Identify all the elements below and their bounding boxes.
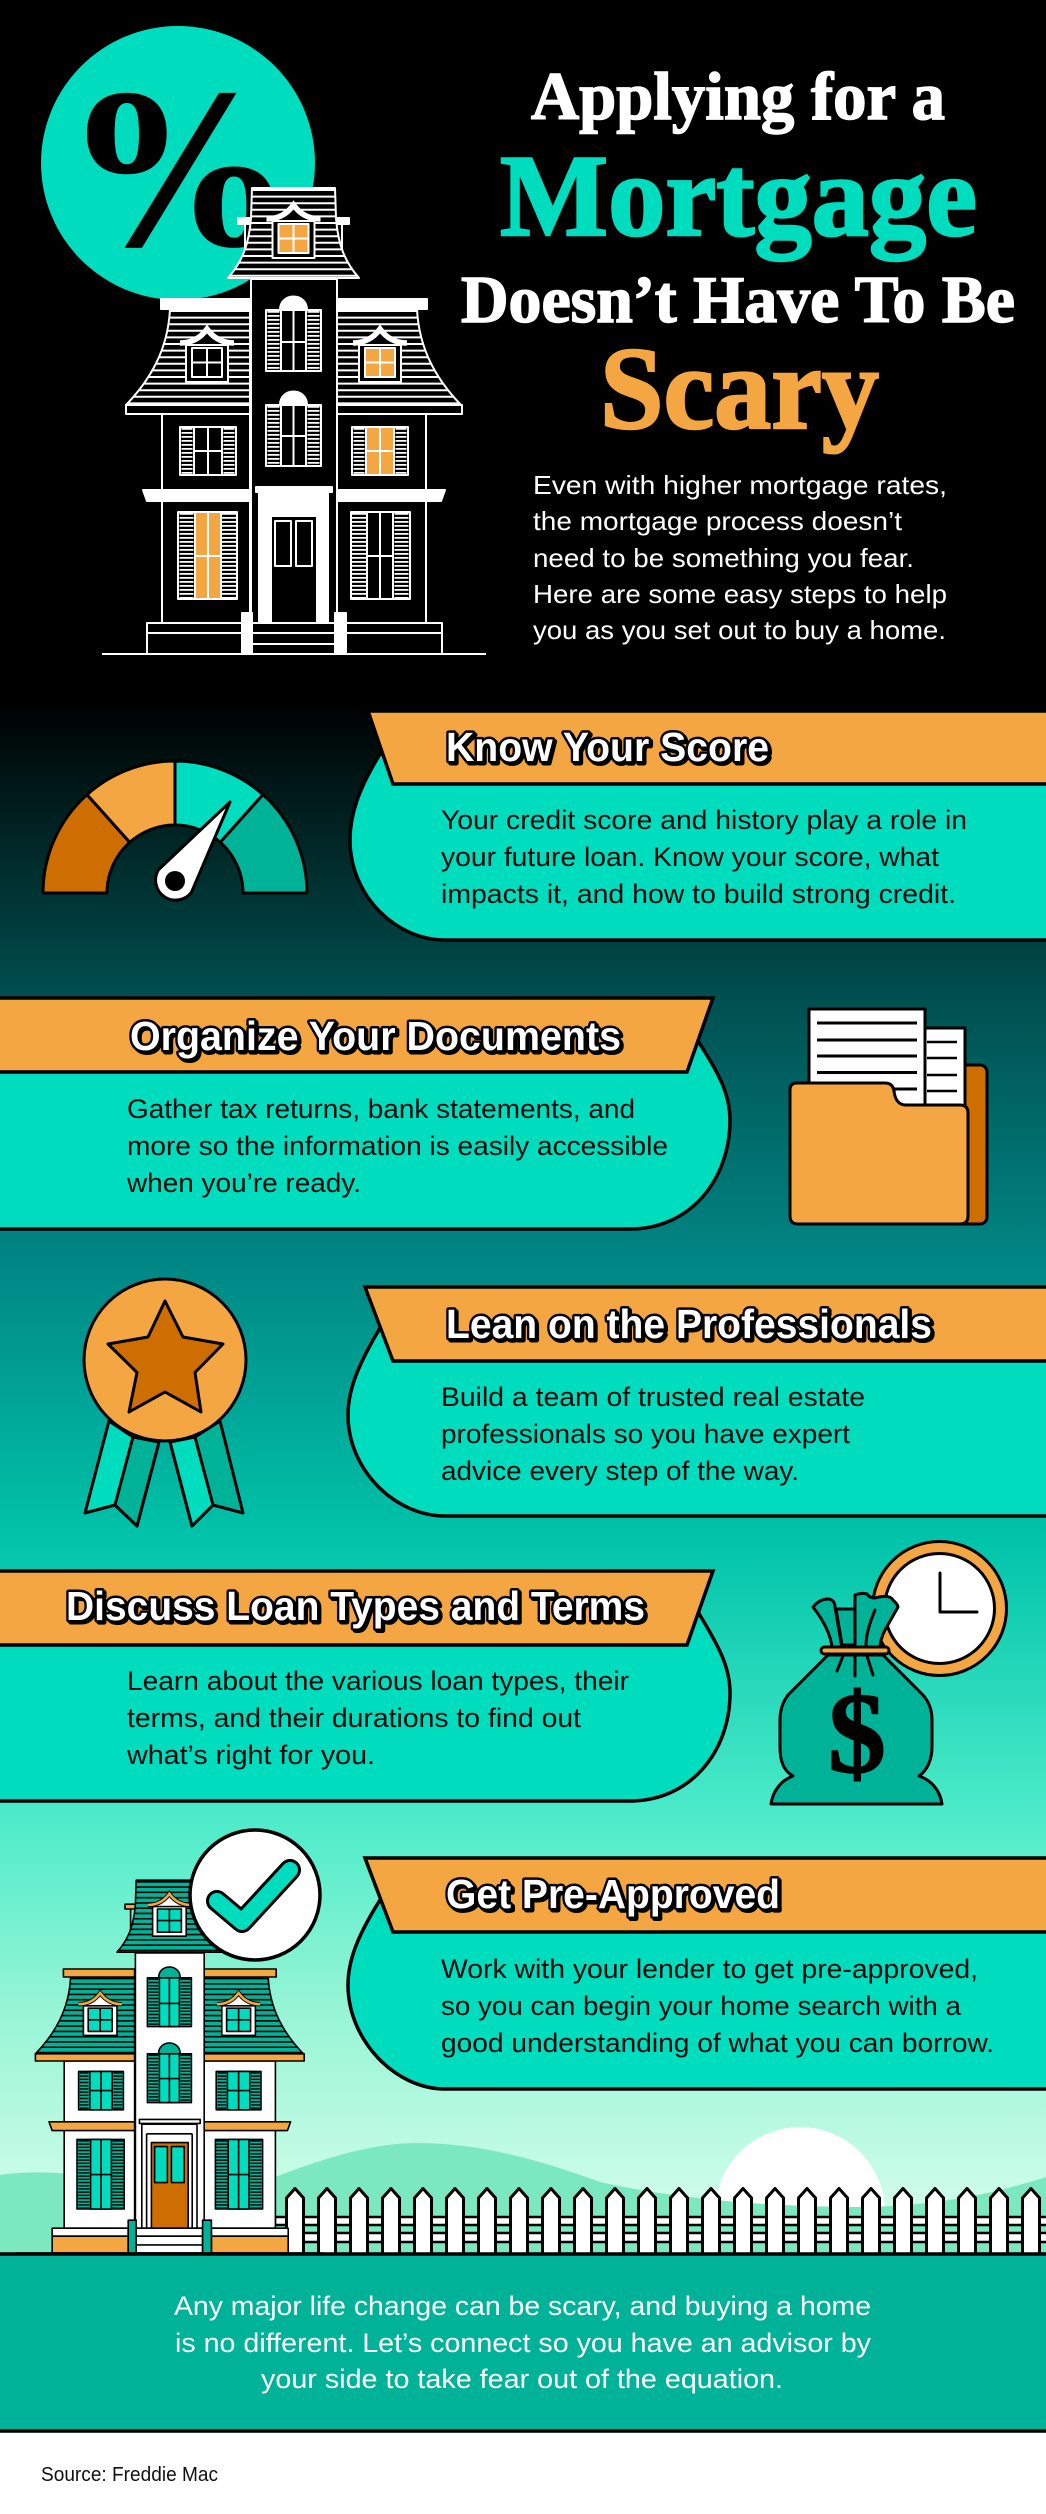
- intro text: [533, 470, 947, 645]
- icon: percent circle: [41, 26, 315, 300]
- footer white: [0, 2433, 1046, 2514]
- panel: lean on the professionals: [348, 1287, 1046, 1516]
- body: know your score: [441, 805, 967, 909]
- panel: closing band: [0, 2254, 1046, 2431]
- picket fence: [275, 2187, 1046, 2254]
- title: Doesn’t Have To Be: [461, 263, 1015, 337]
- intro text: the mortgage process doesn’t: [533, 506, 903, 536]
- body: organize your documents: [126, 1094, 668, 1198]
- panel: organize your documents: [0, 998, 730, 1229]
- icon: sun: [715, 2127, 885, 2297]
- panel: get pre-approved: [348, 1858, 1046, 2089]
- body: lean on the professionals: advice every step of the way.: [441, 1456, 799, 1486]
- icon: money bag and clock: [771, 1542, 1006, 1804]
- body: discuss loan types and terms: what’s right for you.: [126, 1740, 375, 1770]
- title: [461, 58, 1015, 454]
- heading: organize your documents: Organize Your Documents: [130, 1013, 621, 1059]
- source: Source: Freddie Mac: [41, 2464, 218, 2486]
- icon: dark haunted house: [102, 188, 486, 654]
- icon: check badge: [190, 1830, 320, 1960]
- icon: percent circle: %: [82, 54, 279, 294]
- panel: know your score: [350, 711, 1046, 940]
- body: lean on the professionals: [441, 1382, 865, 1486]
- hills: [0, 2143, 1046, 2255]
- body: lean on the professionals: professionals so you have expert: [441, 1419, 851, 1449]
- body: organize your documents: more so the information is easily accessible: [127, 1131, 668, 1161]
- body: get pre-approved: Work with your lender to get pre-approved,: [441, 1954, 978, 1984]
- heading: know your score: Know Your Score: [446, 724, 769, 770]
- closing text: Any major life change can be scary, and buying a home: [174, 2291, 871, 2321]
- body: know your score: Your credit score and history play a role in: [441, 805, 967, 835]
- intro text: you as you set out to buy a home.: [533, 615, 946, 645]
- panel: discuss loan types and terms: [0, 1571, 730, 1801]
- body: get pre-approved: [441, 1954, 994, 2058]
- heading: lean on the professionals: Lean on the Professionals: [446, 1301, 932, 1347]
- icon: medal with star: [84, 1279, 246, 1526]
- intro text: need to be something you fear.: [533, 543, 914, 573]
- closing text: is no different. Let’s connect so you have an advisor by: [175, 2328, 872, 2358]
- icon: credit score gauge: [43, 761, 307, 900]
- icon: light house: [16, 1880, 323, 2253]
- icon: money bag and clock: $: [828, 1670, 886, 1798]
- body: get pre-approved: so you can begin your home search with a: [441, 1991, 962, 2021]
- body: know your score: impacts it, and how to build strong credit.: [441, 879, 956, 909]
- title: Applying for a: [531, 58, 945, 134]
- body: lean on the professionals: Build a team of trusted real estate: [441, 1382, 865, 1412]
- title: Scary: [600, 323, 879, 454]
- body: discuss loan types and terms: terms, and their durations to find out: [127, 1703, 582, 1733]
- intro text: Here are some easy steps to help: [533, 579, 947, 609]
- title: Mortgage: [500, 132, 977, 261]
- header black panel: [0, 0, 1046, 700]
- body: discuss loan types and terms: [126, 1666, 629, 1770]
- body: organize your documents: when you’re ready.: [126, 1168, 361, 1198]
- heading: discuss loan types and terms: Discuss Loan Types and Terms: [66, 1583, 645, 1629]
- body: organize your documents: Gather tax returns, bank statements, and: [127, 1094, 635, 1124]
- heading: get pre-approved: Get Pre-Approved: [446, 1871, 780, 1917]
- closing text: your side to take fear out of the equation.: [261, 2364, 783, 2394]
- body: get pre-approved: good understanding of what you can borrow.: [441, 2028, 994, 2058]
- body: know your score: your future loan. Know your score, what: [441, 842, 940, 872]
- intro text: Even with higher mortgage rates,: [533, 470, 947, 500]
- closing text: [174, 2291, 872, 2394]
- icon: document folder: [790, 1009, 987, 1224]
- body: discuss loan types and terms: Learn about the various loan types, their: [127, 1666, 629, 1696]
